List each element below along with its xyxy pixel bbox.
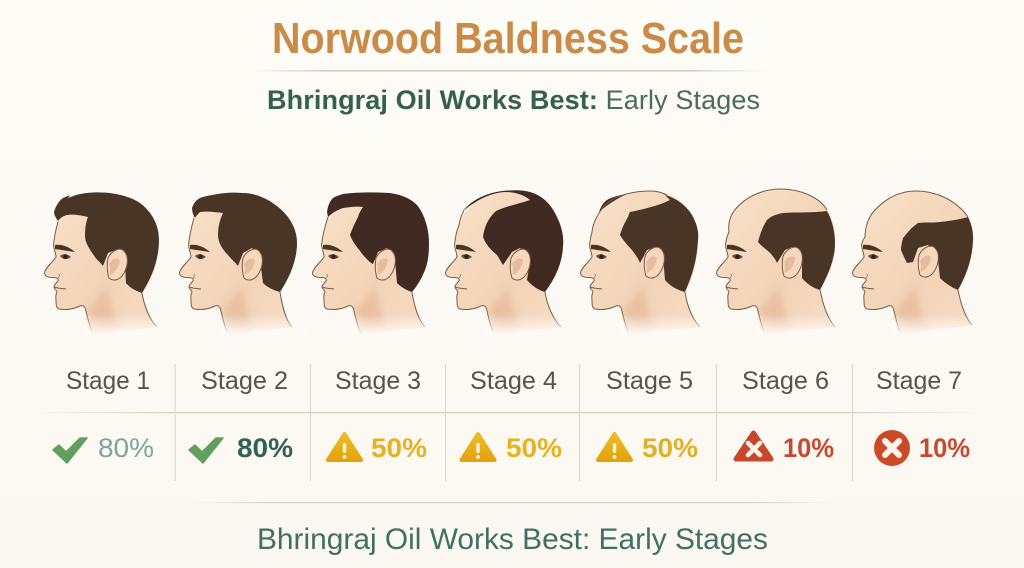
head: stage 5 [580,191,710,338]
value: stage 4: 50% [506,433,562,463]
icon: warning stage 5 [598,434,631,460]
footer text: Bhringraj Oil Works Best: Early Stages [257,523,768,556]
label: stage 1: Stage 1 [66,367,150,395]
head: stage 1 [44,192,174,338]
head: stage 6 [716,189,846,338]
icon: check stage 2 [189,438,223,463]
icon: red cross stage 7 [874,430,910,466]
label: stage 5: Stage 5 [606,367,693,395]
icon: red warning stage 6 [736,433,771,459]
label: stage 2: Stage 2 [201,367,288,395]
subtitle: Bhringraj Oil Works Best: Early Stages [267,85,760,115]
title: Norwood Baldness Scale [272,14,744,63]
value: stage 1: 80% [98,433,154,463]
label: stage 3: Stage 3 [335,367,421,395]
head: stage 4 [446,190,575,338]
icon: warning stage 3 [328,434,361,460]
label: stage 6: Stage 6 [742,367,829,395]
label: stage 7: Stage 7 [876,367,962,395]
head: stage 3 [312,192,442,338]
value: stage 5: 50% [642,433,698,463]
value: stage 3: 50% [371,433,427,463]
label: stage 4: Stage 4 [470,367,557,395]
value: stage 2: 80% [237,433,293,463]
head: stage 7 [852,191,982,338]
icon: check stage 1 [53,438,87,463]
value: stage 6: 10% [783,433,834,463]
icon: warning stage 4 [462,434,494,460]
head: stage 2 [180,193,309,338]
value: stage 7: 10% [919,433,970,463]
panel: head illustrations [44,189,982,338]
panel: stage table [30,364,985,481]
